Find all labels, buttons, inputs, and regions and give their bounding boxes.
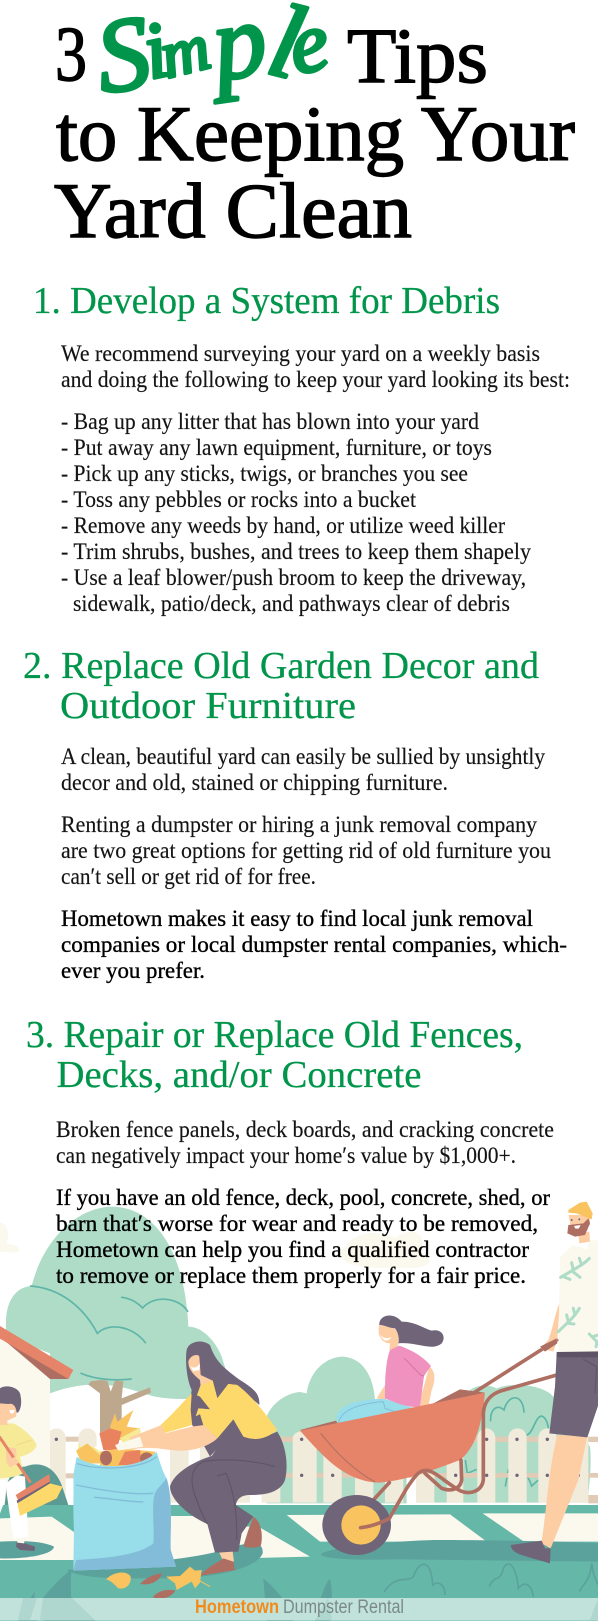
callout paragraph: barn that′s worse for wear and ready to be removed, <box>56 1211 538 1236</box>
callout paragraph: If you have an old fence, deck, pool, concrete, shed, or <box>56 1185 550 1210</box>
girl in wheelbarrow <box>336 1315 444 1428</box>
section 3: repair or replace old fences <box>26 1014 554 1288</box>
callout paragraph: ever you prefer. <box>61 958 205 983</box>
heading 3: Decks, and/or Concrete <box>56 1054 422 1096</box>
footer logo <box>195 1597 404 1618</box>
paragraph: Broken fence panels, deck boards, and cracking concrete <box>56 1117 554 1142</box>
paragraph: can′t sell or get rid of for free. <box>61 864 316 889</box>
title: Tips <box>347 12 488 99</box>
back bushes <box>267 1357 591 1503</box>
checklist: - Trim shrubs, bushes, and trees to keep them shapely <box>61 539 531 564</box>
intro paragraph: and doing the following to keep your yard looking its best: <box>61 367 570 392</box>
ground <box>0 1505 600 1621</box>
intro paragraph <box>61 341 570 392</box>
footer logo: Hometown <box>195 1597 279 1618</box>
fence <box>47 1428 600 1503</box>
tree outlines <box>31 1286 188 1380</box>
wheelbarrow with girl and man <box>300 1202 600 1563</box>
illustration: yard cleaning scene <box>0 1180 600 1622</box>
checklist <box>61 409 531 616</box>
checklist: sidewalk, patio/deck, and pathways clear of debris <box>73 591 510 616</box>
plant shadows near band <box>18 1569 332 1621</box>
section 1: develop a system for debris <box>33 280 570 616</box>
title: to Keeping Your <box>56 90 575 177</box>
footer logo: Dumpster Rental <box>283 1597 404 1618</box>
bottom footer band <box>0 1597 600 1620</box>
checklist: - Pick up any sticks, twigs, or branches you see <box>61 461 468 486</box>
callout paragraph <box>61 906 567 983</box>
paragraph <box>61 744 545 795</box>
title: 3 <box>55 10 87 97</box>
heading 1: 1. Develop a System for Debris <box>33 280 500 322</box>
intro paragraph: We recommend surveying your yard on a weekly basis <box>61 341 540 366</box>
child with broom <box>0 1386 63 1551</box>
heading 3: 3. Repair or Replace Old Fences, <box>26 1014 523 1056</box>
heading 2: Outdoor Furniture <box>60 685 356 727</box>
bush outlines <box>465 1398 550 1487</box>
title: Yard Clean <box>54 167 412 254</box>
man pushing wheelbarrow <box>511 1202 600 1563</box>
paragraph: Renting a dumpster or hiring a junk removal company <box>61 812 537 837</box>
heading 2: 2. Replace Old Garden Decor and <box>23 645 539 687</box>
woman kneeling <box>115 1341 287 1576</box>
paragraph <box>61 812 551 889</box>
section 2: replace old garden decor and outdoor furniture <box>23 645 567 983</box>
wheelbarrow rim <box>300 1389 485 1434</box>
tree trunk <box>88 1380 151 1433</box>
wheelbarrow tray <box>300 1393 485 1483</box>
checklist: - Toss any pebbles or rocks into a bucket <box>61 487 417 512</box>
title <box>54 0 575 254</box>
callout paragraph: Hometown makes it easy to find local junk removal <box>61 906 533 931</box>
callout paragraph: to remove or replace them properly for a fair price. <box>56 1263 526 1288</box>
callout paragraph: companies or local dumpster rental companies, which- <box>61 932 567 957</box>
paragraph: A clean, beautiful yard can easily be sullied by unsightly <box>61 744 545 769</box>
shirt leaves <box>558 1258 598 1347</box>
script word: Simple: i <box>135 6 175 97</box>
checklist: - Remove any weeds by hand, or utilize weed killer <box>61 513 505 538</box>
callout paragraph <box>56 1185 550 1288</box>
background cream clouds <box>0 1222 429 1268</box>
tree crown <box>6 1207 233 1399</box>
fallen leaves <box>106 1567 210 1599</box>
handles and frame <box>361 1340 600 1528</box>
callout paragraph: Hometown can help you find a qualified contractor <box>56 1237 529 1262</box>
paragraph: are two great options for getting rid of old furniture you <box>61 838 551 863</box>
checklist: - Use a leaf blower/push broom to keep the driveway, <box>61 565 526 590</box>
scene artwork <box>0 1202 600 1621</box>
paragraph: can negatively impact your home′s value by $1,000+. <box>56 1143 516 1168</box>
script word: Simple: m <box>153 10 217 93</box>
checklist: - Bag up any litter that has blown into your yard <box>61 409 479 434</box>
house <box>0 1326 73 1505</box>
garbage bag with leaves <box>73 1410 176 1571</box>
paragraph <box>56 1117 554 1168</box>
heading 2 <box>23 645 539 727</box>
checklist: - Put away any lawn equipment, furniture, or toys <box>61 435 492 460</box>
dark bush behind broom <box>3 1464 68 1517</box>
wheel <box>322 1495 391 1555</box>
paragraph: decor and old, stained or chipping furniture. <box>61 770 448 795</box>
heading 3 <box>26 1014 523 1096</box>
